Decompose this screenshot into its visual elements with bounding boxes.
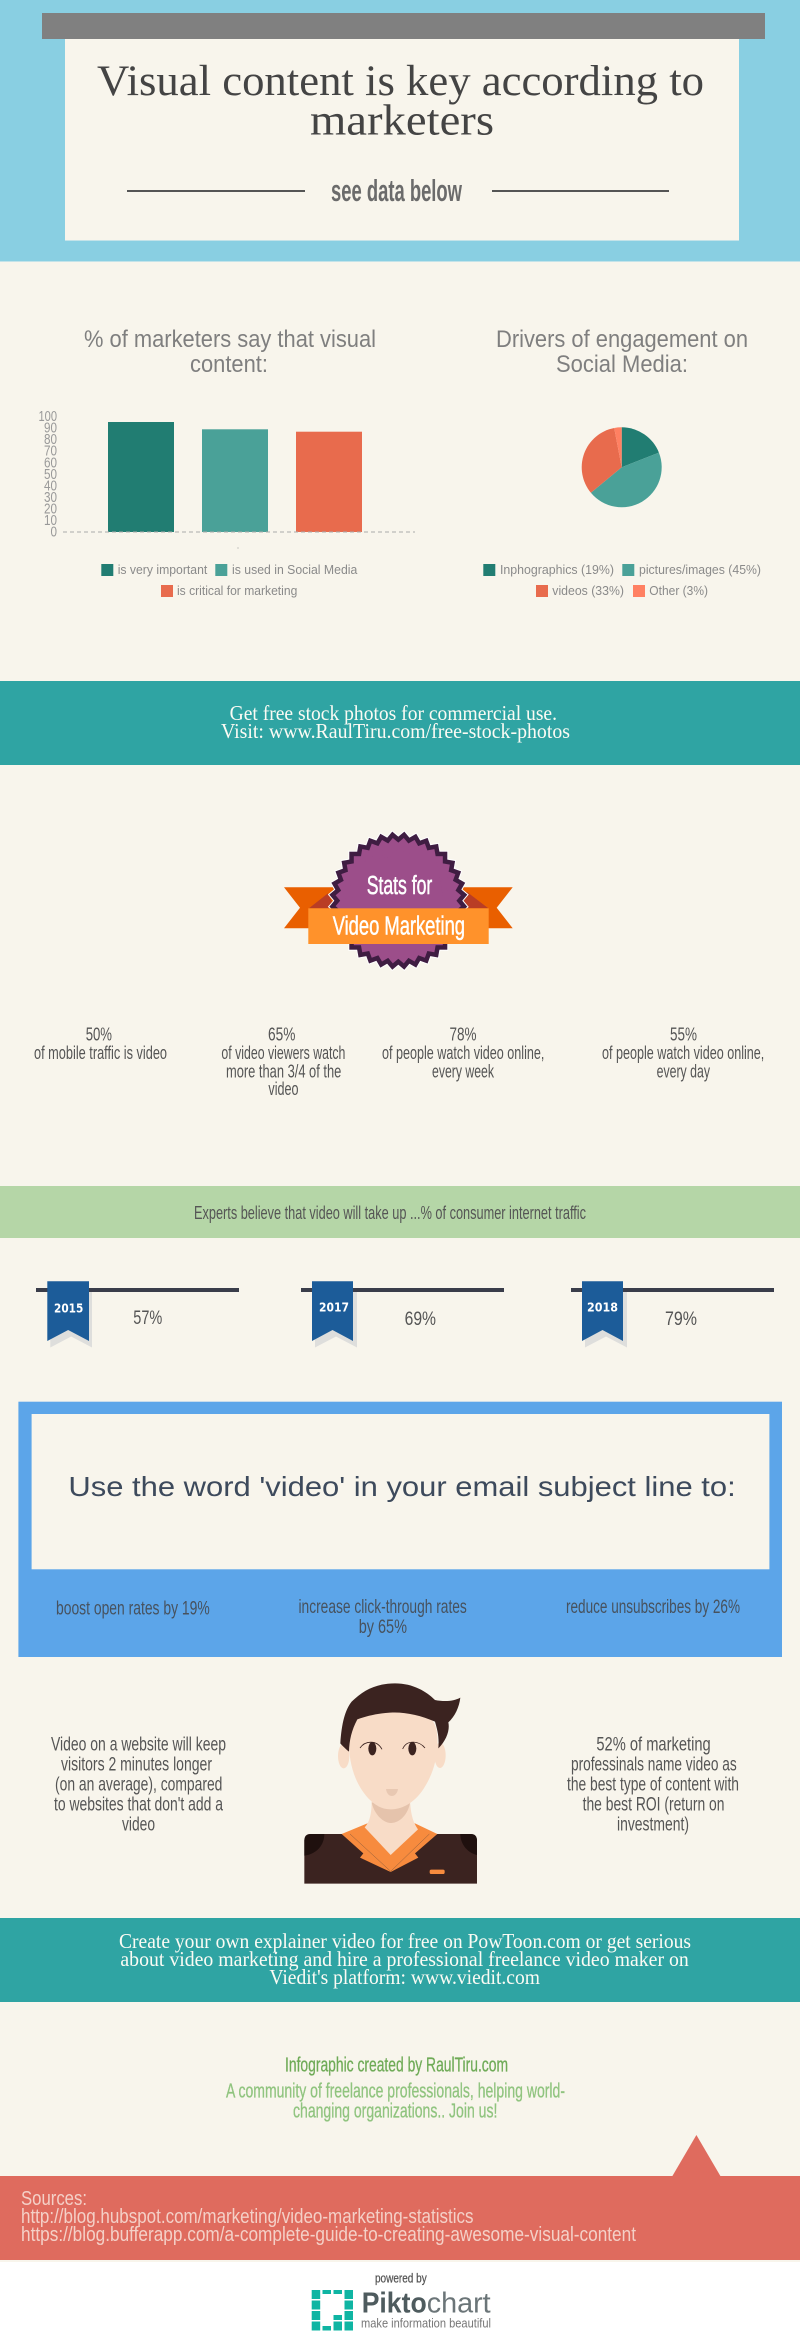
title: marketers: [310, 98, 494, 144]
hair: [340, 1683, 460, 1752]
panel: sources: http://blog.hubspot.com/marketing/video-marketing-statistics: [21, 2205, 474, 2228]
pie chart legend: pictures/images (45%): [639, 562, 761, 577]
text: video has best ROI: investment): [617, 1814, 689, 1836]
panel stats: boost open rates by 19%: [56, 1597, 210, 1619]
banner: explainer video: about video marketing and hire a professional freelance video maker on: [120, 1947, 689, 1971]
ears: [338, 1744, 349, 1768]
text: video has best ROI: 52% of marketing: [596, 1734, 711, 1756]
stat: 50%: of mobile traffic is video: [34, 1042, 167, 1063]
banner: experts believe: [0, 1186, 800, 1238]
panel stats: [56, 1596, 740, 1638]
face: [349, 1707, 437, 1809]
heading: drivers of engagement: Drivers of engagement on: [496, 326, 748, 353]
pie chart legend: videos (33%): [552, 583, 624, 598]
heading: percent of marketers: content:: [190, 351, 268, 378]
text: keeps visitors longer: to websites that don't add a: [54, 1794, 223, 1816]
banner: experts believe: Experts believe that video will take up ...% of consumer internet traffic: [194, 1202, 586, 1223]
text: video has best ROI: [567, 1734, 739, 1836]
footer: piktochart logo: chart: [427, 2288, 491, 2320]
stat: 65%: more than 3/4 of the: [226, 1060, 341, 1081]
panel: sources: [0, 2135, 800, 2260]
text: keeps visitors longer: (on an average), compared: [55, 1774, 222, 1796]
header panel: [0, 0, 800, 262]
seal outline: [328, 830, 469, 971]
footer: piktochart logo: powered by: [375, 2270, 427, 2285]
footer: piktochart logo: make information beautiful: [361, 2317, 491, 2331]
banner: free stock photos: Get free stock photos for commercial use.: [230, 701, 557, 725]
stat: 78%: 78%: [450, 1024, 476, 1045]
neck: [365, 1800, 418, 1855]
pie chart legend: Other (3%): [649, 583, 708, 598]
bar chart legend: is very important: [118, 562, 208, 577]
year marker: 2015: 2015: [54, 1302, 83, 1316]
pie chart: [582, 427, 662, 507]
banner: explainer video: Viedit's platform: www.viedit.com: [269, 1965, 540, 1989]
illustration: man in dark shirt: [304, 1683, 477, 1884]
text: keeps visitors longer: video: [122, 1814, 155, 1836]
year marker: 2017: 2017: [319, 1301, 349, 1315]
heading: drivers of engagement: Social Media:: [556, 351, 688, 378]
panel: sources: https://blog.bufferapp.com/a-complete-guide-to-creating-awesome-visual-content: [21, 2223, 636, 2246]
stat: 65%: of video viewers watch: [221, 1042, 345, 1063]
stat: 55%: [602, 1024, 764, 1081]
credit: created by: Infographic created by RaulTiru.com: [285, 2055, 508, 2077]
year marker: 2018: 2018: [587, 1301, 618, 1315]
nose: [386, 1789, 398, 1796]
torso: [304, 1834, 477, 1884]
pie chart legend: [483, 562, 761, 598]
year marker: 2015: 57%: [133, 1307, 162, 1329]
y axis labels: 80: [44, 432, 57, 448]
stat: 65%: [221, 1024, 345, 1099]
credit: community tagline: [226, 2081, 565, 2122]
banner: explainer video: [0, 1918, 800, 2002]
year marker: 2018: 79%: [665, 1308, 697, 1330]
title: [97, 58, 704, 144]
bar: is used in social media: [202, 429, 268, 532]
stat: 78%: [382, 1024, 544, 1081]
y axis labels: 60: [44, 455, 57, 471]
y axis labels: 0: [50, 525, 57, 541]
y axis labels: [38, 409, 57, 541]
panel stats: by 65%: [359, 1616, 407, 1638]
pie chart legend: Inphographics (19%): [500, 562, 614, 577]
logo mark: [312, 2290, 353, 2330]
text: video has best ROI: the best ROI (return on: [583, 1794, 724, 1816]
stat: 55%: 55%: [670, 1024, 697, 1045]
heading: percent of marketers: [84, 326, 376, 378]
eyes: [368, 1742, 376, 1755]
year marker: 2017: 69%: [405, 1308, 436, 1330]
year marker: 2018: [571, 1281, 774, 1348]
banner: free stock photos: [0, 681, 800, 765]
bar chart: [38, 409, 415, 548]
y axis labels: 100: [38, 409, 57, 425]
stat: 65%: 65%: [268, 1024, 295, 1045]
banner: explainer video: Create your own explainer video for free on PowToon.com or get serious: [119, 1929, 691, 1953]
stat: 55%: every day: [657, 1060, 710, 1081]
y axis labels: 30: [44, 490, 57, 506]
y axis labels: 90: [44, 421, 57, 437]
badge text: Stats for: [367, 872, 433, 900]
stat: 50%: [34, 1024, 167, 1063]
title: Visual content is key according to: [97, 58, 704, 105]
stat: 78%: of people watch video online,: [382, 1042, 544, 1063]
panel: sources: Sources:: [21, 2187, 87, 2210]
stat: 78%: every week: [432, 1060, 494, 1081]
panel heading: Use the word 'video' in your email subject line to:: [68, 1471, 736, 1502]
text: keeps visitors longer: visitors 2 minutes longer: [61, 1754, 212, 1776]
badge text: Video Marketing: [333, 912, 465, 940]
bar: is very important: [108, 422, 174, 532]
seal purple centre: [336, 838, 461, 963]
bar chart legend: [101, 562, 358, 598]
text: keeps visitors longer: Video on a website will keep: [51, 1734, 226, 1756]
ribbon front: [308, 908, 489, 944]
y axis labels: 10: [44, 513, 57, 529]
credit: community tagline: A community of freelance professionals, helping world-: [226, 2081, 565, 2103]
text: keeps visitors longer: [51, 1734, 226, 1836]
y axis labels: 70: [44, 444, 57, 460]
header grey bar: [42, 13, 765, 39]
stat: 50%: 50%: [86, 1024, 112, 1045]
year marker: 2017: [301, 1281, 504, 1348]
bar chart legend: is used in Social Media: [232, 562, 358, 577]
logo wordmark: Pikto: [362, 2288, 427, 2320]
bar: is critical for marketing: [296, 432, 362, 532]
heading: drivers of engagement: [496, 326, 748, 378]
pocket: [430, 1870, 445, 1874]
panel stats: increase click-through rates: [298, 1596, 467, 1618]
stat: 65%: video: [268, 1078, 298, 1099]
bar chart legend: is critical for marketing: [177, 583, 297, 598]
subtitle with rules: see data below: [331, 173, 463, 208]
ribbon tails: [284, 887, 513, 928]
y axis labels: 50: [44, 467, 57, 483]
panel: email subject line: [18, 1402, 782, 1657]
credit: community tagline: changing organizations.. Join us!: [293, 2100, 497, 2122]
seal dark ring: [329, 832, 467, 970]
badge text: [333, 872, 465, 940]
collar: [342, 1823, 437, 1872]
heading: percent of marketers: % of marketers say that visual: [84, 326, 376, 353]
banner: free stock photos: Visit: www.RaulTiru.com/free-stock-photos: [221, 719, 570, 743]
badge: stats for video marketing: [284, 830, 513, 971]
year marker: 2015: [36, 1281, 239, 1348]
footer: piktochart logo: [312, 2270, 491, 2331]
y axis labels: 20: [44, 502, 57, 518]
y axis labels: 40: [44, 478, 57, 494]
